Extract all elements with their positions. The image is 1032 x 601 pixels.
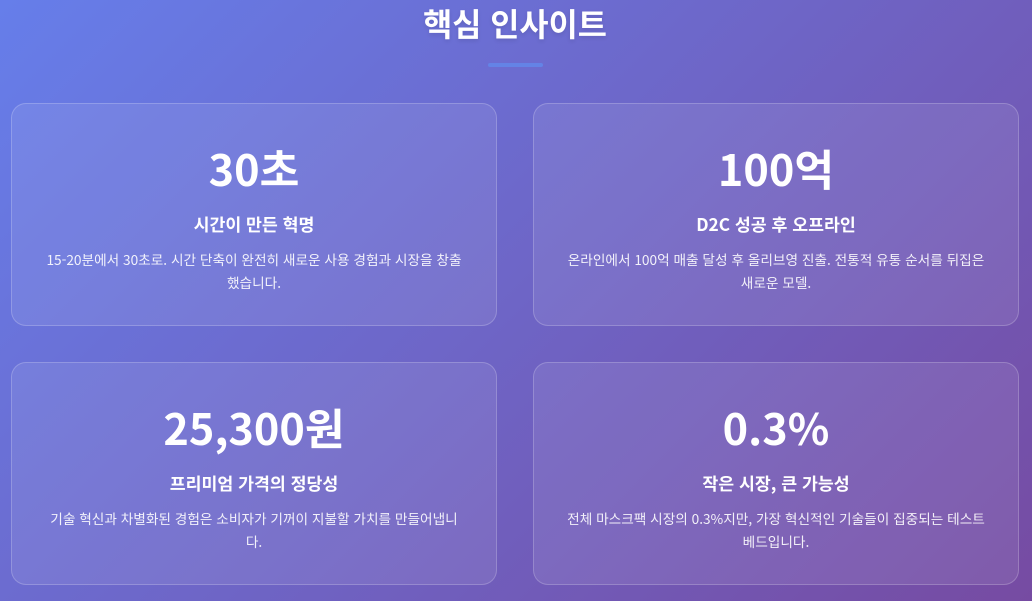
stat: 30초: 30초 — [209, 137, 299, 199]
description: 다. — [246, 531, 262, 551]
heading: small market: 작은 시장, 큰 가능성 — [702, 470, 850, 495]
stat: 100억: 100억 — [718, 137, 834, 199]
description — [50, 508, 458, 551]
description: 베드입니다. — [743, 531, 809, 551]
description: 기술 혁신과 차별화된 경험은 소비자가 기꺼이 지불할 가치를 만들어냅니 — [50, 508, 458, 528]
description: 했습니다. — [227, 272, 281, 292]
panel: premium price — [11, 362, 497, 585]
title: 핵심 인사이트 — [423, 0, 607, 46]
heading: time revolution: 시간이 만든 혁명 — [194, 211, 314, 236]
description: 15-20분에서 30초로. 시간 단축이 완전히 새로운 사용 경험과 시장을 창출 — [46, 249, 462, 269]
description: 새로운 모델. — [741, 272, 811, 292]
stat: 0.3%: 0.3% — [723, 396, 829, 458]
stat: 25,300원: 25,300원 — [163, 396, 345, 458]
description: 전체 마스크팩 시장의 0.3%지만, 가장 혁신적인 기술들이 집중되는 테스트 — [567, 508, 985, 528]
description: 온라인에서 100억 매출 달성 후 올리브영 진출. 전통적 유통 순서를 뒤집은 — [568, 249, 984, 269]
heading: premium justification: 프리미엄 가격의 정당성 — [170, 470, 338, 495]
panel: 0.3 percent — [533, 362, 1019, 585]
title underline — [488, 63, 543, 67]
panel: 10 billion won — [533, 103, 1019, 326]
panel: 30 seconds — [11, 103, 497, 326]
heading: D2C: D2C 성공 후 오프라인 — [696, 211, 856, 236]
description — [46, 249, 462, 292]
description — [567, 508, 985, 551]
description — [568, 249, 984, 292]
